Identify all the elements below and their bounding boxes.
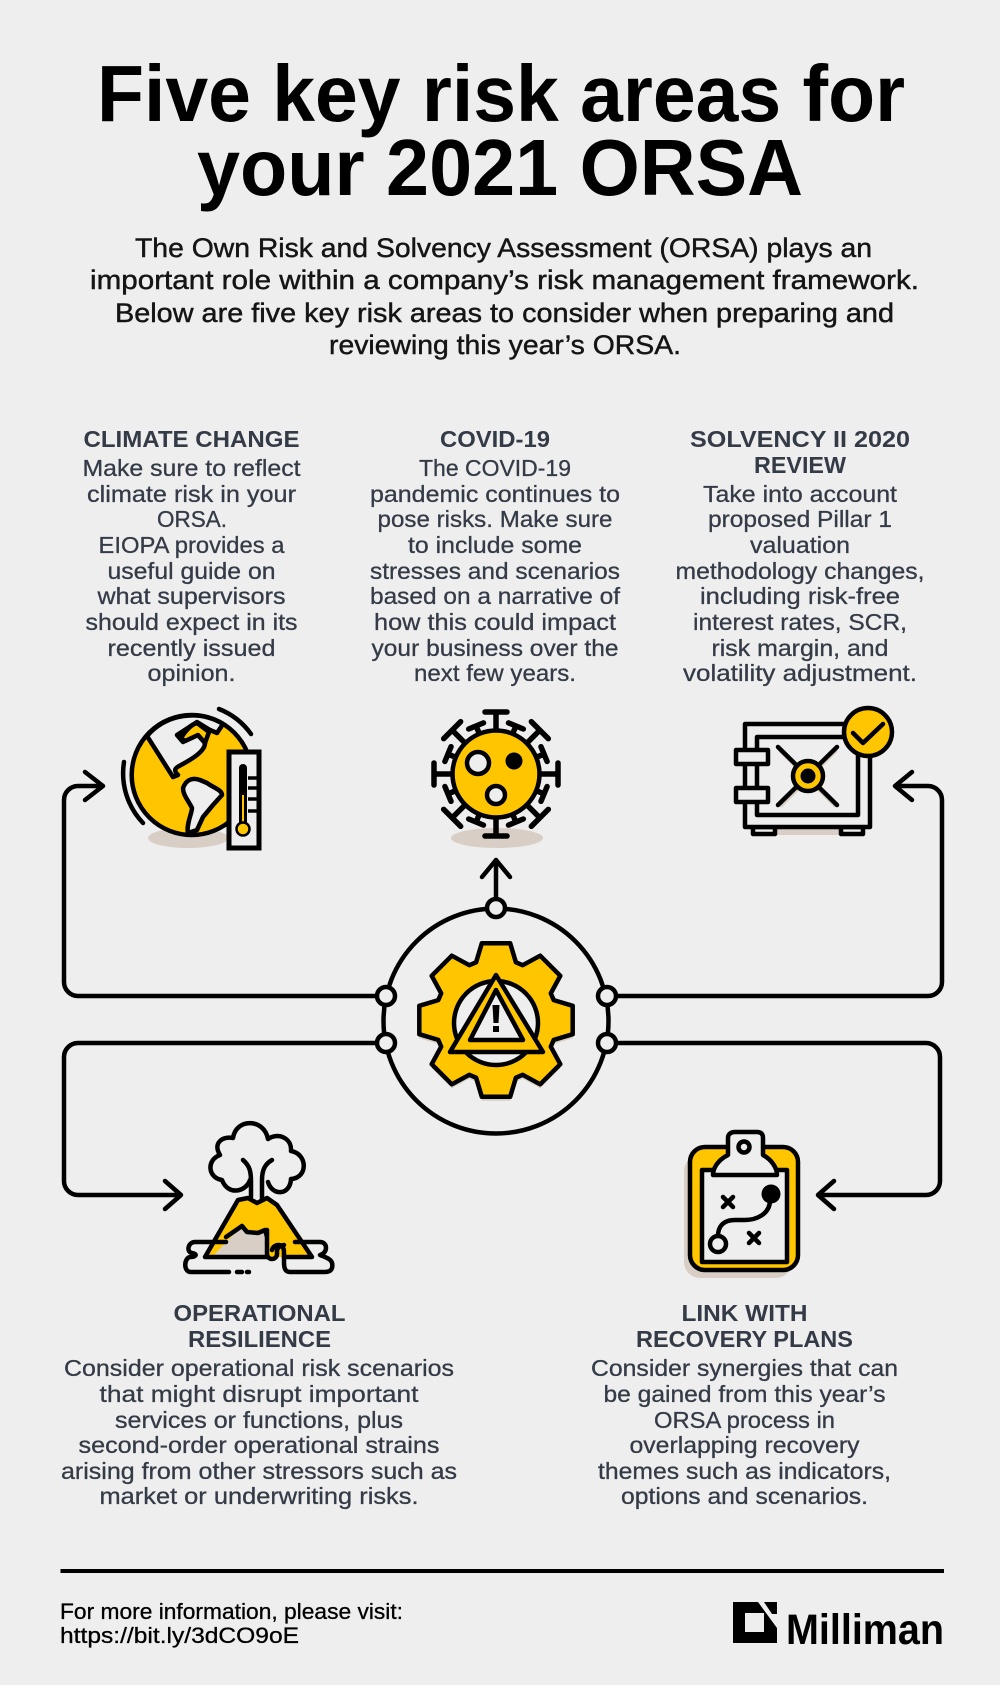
- text: climate change body: recently issued: [108, 635, 276, 661]
- text: solvency body: Take into account: [703, 481, 897, 507]
- arrow: to covid-19: [482, 860, 510, 908]
- heading: operational resilience: [174, 1300, 346, 1352]
- arrow: to solvency ii: [607, 772, 942, 996]
- panel: link with recovery plans: [591, 1300, 898, 1509]
- text: covid-19 body: stresses and scenarios: [370, 558, 620, 584]
- text: solvency body: proposed Pillar 1: [708, 506, 892, 532]
- text: covid-19 body: next few years.: [414, 660, 576, 686]
- text: covid-19 body: based on a narrative of: [370, 583, 620, 609]
- heading: solvency ii 2020 review: SOLVENCY II 2020: [690, 426, 910, 452]
- arrow: to climate change: [64, 772, 386, 996]
- text: recovery plans body: [591, 1355, 898, 1509]
- footer: more information link: For more information, please visit:: [60, 1599, 403, 1624]
- logo: Milliman: [733, 1602, 944, 1654]
- panel: climate change: [82, 426, 301, 686]
- panel: operational resilience: [61, 1300, 457, 1509]
- text: covid-19 body: pandemic continues to: [370, 481, 620, 507]
- text: climate change body: EIOPA provides a: [98, 532, 285, 558]
- text: recovery plans body: themes such as indicators,: [598, 1458, 891, 1484]
- text: covid-19 body: The COVID-19: [419, 455, 571, 481]
- connector nodes: [377, 899, 616, 1052]
- text: operational resilience body: second-order operational strains: [78, 1432, 440, 1458]
- text: covid-19 body: to include some: [408, 532, 582, 558]
- arrow: to operational resilience: [64, 1043, 386, 1209]
- heading: solvency ii 2020 review: REVIEW: [754, 452, 847, 478]
- text: recovery plans body: ORSA process in: [654, 1407, 835, 1433]
- logo: Milliman: Milliman: [786, 1606, 944, 1654]
- text: solvency body: risk margin, and: [712, 635, 888, 661]
- heading: climate change: CLIMATE CHANGE: [84, 426, 300, 452]
- text: operational resilience body: services or functions, plus: [115, 1407, 403, 1433]
- text: climate change body: [82, 455, 301, 686]
- panel: covid-19: [370, 426, 620, 686]
- intro text: reviewing this year’s ORSA.: [329, 330, 681, 360]
- text: climate change body: opinion.: [148, 660, 236, 686]
- heading: operational resilience: OPERATIONAL: [174, 1300, 346, 1326]
- text: solvency body: volatility adjustment.: [683, 660, 917, 686]
- heading: solvency ii 2020 review: [690, 426, 910, 478]
- text: recovery plans body: be gained from this year’s: [604, 1381, 886, 1407]
- text: solvency body: valuation: [750, 532, 850, 558]
- text: operational resilience body: Consider operational risk scenarios: [64, 1355, 454, 1381]
- text: operational resilience body: arising from other stressors such as: [61, 1458, 457, 1484]
- intro text: [90, 233, 919, 360]
- icon: safe with check badge: [736, 708, 892, 835]
- title: [97, 49, 905, 212]
- icon: coronavirus: [434, 712, 558, 848]
- text: recovery plans body: options and scenarios.: [621, 1483, 868, 1509]
- text: recovery plans body: overlapping recovery: [630, 1432, 860, 1458]
- intro text: The Own Risk and Solvency Assessment (ORSA) plays an: [135, 233, 872, 263]
- text: climate change body: climate risk in your: [87, 481, 296, 507]
- text: operational resilience body: [61, 1355, 457, 1509]
- text: operational resilience body: that might disrupt important: [100, 1381, 419, 1407]
- text: recovery plans body: Consider synergies that can: [591, 1355, 898, 1381]
- title: your 2021 ORSA: [197, 123, 803, 212]
- arrow: to recovery plans: [607, 1043, 940, 1209]
- footer: more information link: [60, 1599, 403, 1648]
- icon: erupting volcano: [185, 1123, 332, 1272]
- panel: solvency ii 2020 review: [676, 426, 924, 686]
- text: covid-19 body: [370, 455, 620, 686]
- icon: globe with thermometer: [123, 709, 259, 848]
- heading: link with recovery plans: RECOVERY PLANS: [636, 1326, 853, 1352]
- icon: clipboard with plan: [684, 1132, 798, 1278]
- footer: more information link: https://bit.ly/3dCO9oE: [60, 1623, 299, 1648]
- text: solvency body: including risk-free: [700, 583, 900, 609]
- title: Five key risk areas for: [97, 49, 905, 138]
- text: solvency body: methodology changes,: [676, 558, 924, 584]
- intro text: Below are five key risk areas to consider when preparing and: [115, 298, 894, 328]
- text: climate change body: what supervisors: [96, 583, 286, 609]
- text: climate change body: ORSA.: [157, 506, 227, 532]
- heading: operational resilience: RESILIENCE: [188, 1326, 331, 1352]
- text: covid-19 body: how this could impact: [374, 609, 616, 635]
- diagram: central hub ring and connectors: [64, 772, 942, 1209]
- text: climate change body: Make sure to reflect: [82, 455, 301, 481]
- text: climate change body: useful guide on: [108, 558, 276, 584]
- text: covid-19 body: your business over the: [372, 635, 618, 661]
- text: climate change body: should expect in its: [86, 609, 298, 635]
- text: covid-19 body: pose risks. Make sure: [378, 506, 612, 532]
- icon: gear with warning triangle: [419, 943, 573, 1101]
- heading: covid-19: COVID-19: [440, 426, 550, 452]
- heading: link with recovery plans: [636, 1300, 853, 1352]
- text: operational resilience body: market or underwriting risks.: [100, 1483, 418, 1509]
- text: solvency body: interest rates, SCR,: [693, 609, 907, 635]
- heading: link with recovery plans: LINK WITH: [682, 1300, 808, 1326]
- intro text: important role within a company’s risk management framework.: [90, 265, 919, 295]
- text: solvency body: [676, 481, 924, 686]
